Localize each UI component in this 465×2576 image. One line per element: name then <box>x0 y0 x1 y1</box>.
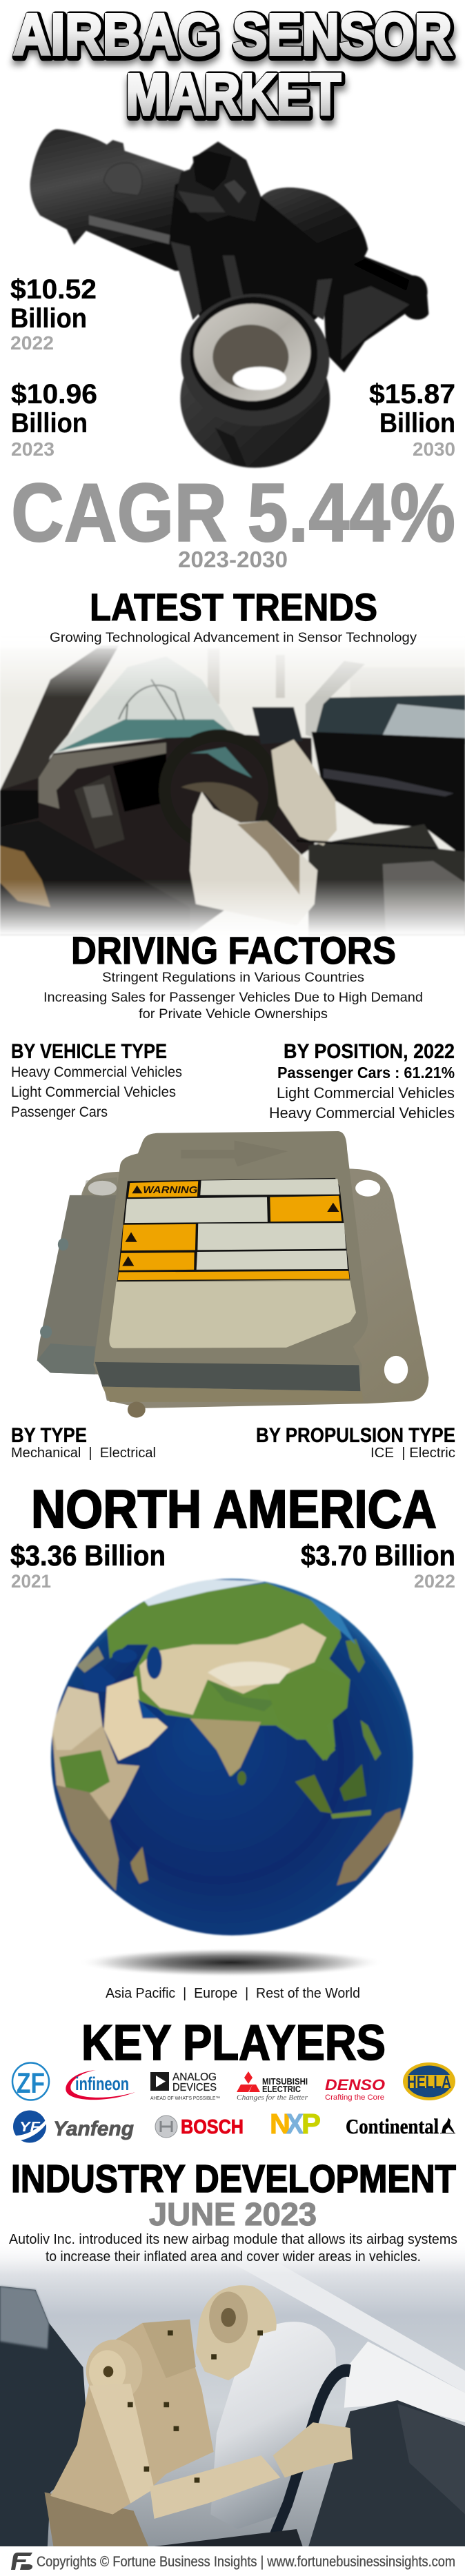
text: june 2023 development: Autoliv Inc. introduced its new airbag module that allows its airbag systems <box>9 2231 457 2247</box>
segment: by vehicle type: Light Commercial Vehicles <box>11 1084 176 1100</box>
stat: north america 2022: 2022 <box>414 1571 455 1592</box>
heading: driving factors: DRIVING FACTORS <box>71 929 396 972</box>
text: june 2023 development: to increase their inflated area and cover wider areas in vehicles. <box>46 2249 421 2264</box>
stat: north america 2021: $3.36 Billion <box>10 1539 166 1572</box>
stat: 2030: $15.87 <box>369 379 455 409</box>
logo: Analog Devices: DEVICES <box>172 2082 217 2093</box>
stat: north america 2021: 2021 <box>11 1571 51 1592</box>
segment: by vehicle type: Heavy Commercial Vehicles <box>11 1064 182 1080</box>
heading: latest trends: Growing Technological Advancement in Sensor Technology <box>50 630 417 645</box>
cagr: 2023-2030 <box>178 547 288 572</box>
logo: Analog Devices: ANALOG <box>172 2071 217 2083</box>
segment: by propulsion type <box>256 1424 455 1461</box>
stat: 2030: 2030 <box>413 438 455 460</box>
logo: Continental: Continental <box>346 2114 439 2138</box>
text: other regions: Asia Pacific | Europe | Rest of the World <box>106 1986 360 2001</box>
logo: Bosch: BOSCH <box>181 2116 244 2138</box>
image: airbag control module: WARNING <box>143 1185 198 1196</box>
logo: Mitsubishi Electric: MITSUBISHI <box>262 2076 308 2087</box>
stat: 2022: $10.52 <box>10 274 97 305</box>
segment: by position: Light Commercial Vehicles <box>277 1084 455 1102</box>
photo: crashed car interior with airbags <box>0 636 465 935</box>
segment: by position <box>269 1040 455 1122</box>
heading: driving factors <box>43 929 423 1022</box>
logo: NXP: N <box>270 2108 290 2140</box>
logo: Analog Devices <box>150 2071 220 2101</box>
title: MARKET <box>126 70 344 136</box>
globe shadow <box>78 1948 384 1977</box>
logo: Mitsubishi Electric <box>237 2071 308 2102</box>
text: june 2023 development <box>9 2231 457 2264</box>
segment: by vehicle type: BY VEHICLE TYPE <box>11 1040 167 1063</box>
stat: 2023: Billion <box>11 408 88 438</box>
heading: driving factors: Increasing Sales for Passenger Vehicles Due to High Demand <box>43 990 423 1005</box>
stat: 2022: 2022 <box>10 332 54 354</box>
logo: Mitsubishi Electric: ELECTRIC <box>262 2084 301 2094</box>
title: MARKET <box>127 63 342 130</box>
stat: 2023: 2023 <box>11 438 55 460</box>
logo: Denso: DENSO <box>325 2076 385 2093</box>
logo: Yanfeng <box>11 2111 134 2142</box>
logo: Yanfeng: Yanfeng <box>53 2118 134 2140</box>
heading: latest trends <box>50 585 417 645</box>
subheading: june 2023: JUNE 2023 <box>149 2196 317 2232</box>
segment: by type: BY TYPE <box>11 1424 87 1447</box>
logo: Denso: Crafting the Core <box>325 2093 384 2102</box>
heading: driving factors: for Private Vehicle Ownerships <box>139 1006 328 1022</box>
image: airbag control module <box>37 1131 428 1418</box>
logo: ZF: ZF <box>17 2067 45 2099</box>
segment: by position: Passenger Cars : 61.21% <box>277 1064 455 1082</box>
logo: NXP: P <box>301 2108 321 2140</box>
title: MARKET <box>126 62 341 127</box>
heading: latest trends: LATEST TRENDS <box>90 585 377 629</box>
image: earth globe <box>51 1579 413 1936</box>
logo: NXP: X <box>286 2108 304 2140</box>
logo: NXP <box>270 2108 321 2140</box>
segment: by type <box>11 1424 156 1461</box>
logo: Infineon <box>66 2070 135 2100</box>
stat: north america 2022: $3.70 Billion <box>301 1539 455 1572</box>
stat: 2023 <box>11 379 97 460</box>
segment: by propulsion type: ICE | Electric <box>370 1446 455 1461</box>
logo: Hella <box>403 2062 455 2100</box>
heading: key players: KEY PLAYERS <box>81 2016 386 2071</box>
image: crash sensor <box>30 129 428 468</box>
stat: 2030 <box>369 379 455 460</box>
stat: 2023: $10.96 <box>11 379 97 409</box>
segment: by type: Mechanical | Electrical <box>11 1446 156 1461</box>
segment: by position: Heavy Commercial Vehicles <box>269 1104 455 1122</box>
heading: driving factors: Stringent Regulations in Various Countries <box>102 970 364 985</box>
stat: 2022: Billion <box>10 303 87 334</box>
title <box>13 2 455 136</box>
stat: north america 2021 <box>10 1539 166 1592</box>
logo: Mitsubishi Electric: Changes for the Better <box>237 2094 308 2102</box>
stat: 2022 <box>10 274 97 354</box>
logo: Bosch <box>155 2116 244 2138</box>
logo: Hella: HELLA <box>407 2073 451 2092</box>
stat: north america 2022 <box>301 1539 455 1592</box>
segment: by vehicle type <box>11 1040 182 1120</box>
footer <box>0 2546 465 2576</box>
segment: by vehicle type: Passenger Cars <box>11 1104 108 1120</box>
stat: 2030: Billion <box>379 408 455 438</box>
logo: Denso <box>325 2076 385 2102</box>
logo: Infineon: infineon <box>75 2073 129 2094</box>
photo: crash test dummy and airbag <box>0 2238 465 2546</box>
logo: Analog Devices: AHEAD OF WHAT'S POSSIBLE™ <box>150 2096 220 2101</box>
logo: Yanfeng: YF <box>19 2120 41 2135</box>
